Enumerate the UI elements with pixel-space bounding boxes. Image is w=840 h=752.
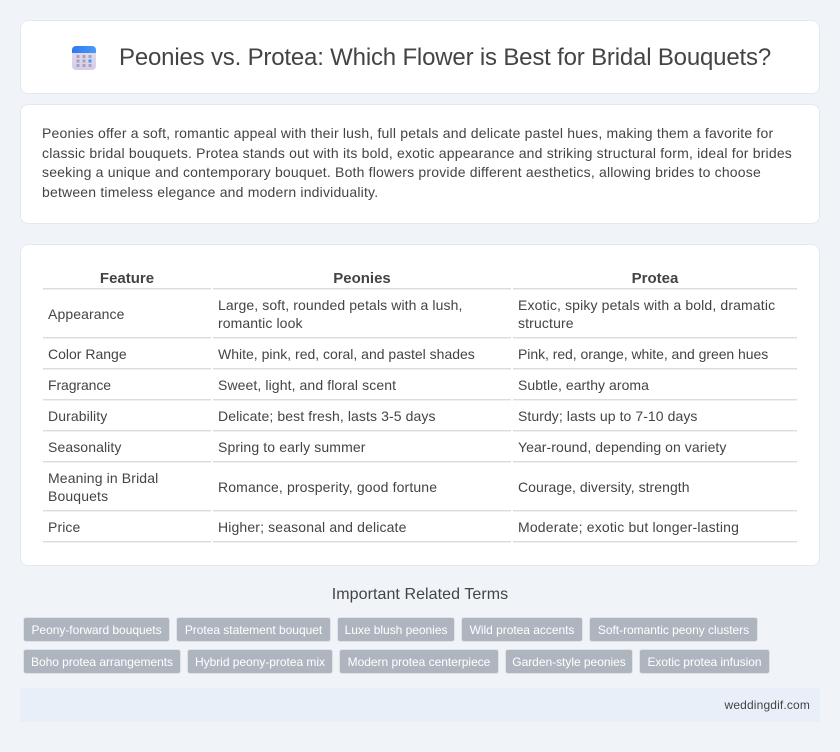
panel: introduction [20, 104, 820, 224]
text block: introduction [42, 125, 792, 200]
tag: Soft-romantic peony clusters [598, 623, 749, 637]
Protea appearance: structure [518, 315, 574, 331]
Peonies appearance: romantic look [218, 315, 303, 331]
Protea seasonality: Year-round, depending on variety [518, 439, 726, 455]
row: Seasonality: Seasonality [48, 439, 121, 455]
Protea color range: Pink, red, orange, white, and green hues [518, 346, 768, 362]
tag [23, 649, 181, 674]
source: weddingdif.com: weddingdif.com [725, 698, 810, 712]
text block: introduction: between timeless elegance and modern individuality. [42, 184, 378, 200]
heading: Important Related Terms: Important Related Terms [332, 586, 508, 603]
table header: Protea [513, 268, 797, 289]
panel: comparison table [20, 244, 820, 566]
Protea fragrance: Subtle, earthy aroma [518, 377, 649, 393]
Peonies seasonality: Spring to early summer [218, 439, 366, 455]
Peonies meaning: Romance, prosperity, good fortune [218, 479, 437, 495]
Protea price: Moderate; exotic but longer-lasting [518, 519, 739, 535]
tag: Garden-style peonies [512, 655, 626, 669]
text block: introduction: seeking a unique and contemporary bouquet. Both flowers provide different aesthetics, allowing brides to choose [42, 164, 761, 180]
Peonies durability: Delicate; best fresh, lasts 3-5 days [218, 408, 436, 424]
text block: introduction: Peonies offer a soft, romantic appeal with their lush, full petals and delicate pastel hues, making them a favorite for [42, 125, 773, 141]
row: Fragrance: Fragrance [48, 377, 111, 393]
Protea meaning: Courage, diversity, strength [518, 479, 690, 495]
tag: Modern protea centerpiece [348, 655, 490, 669]
tag [337, 617, 455, 642]
table header: Protea: Protea [632, 270, 678, 287]
row: Meaning in Bridal Bouquets [48, 470, 158, 504]
Protea durability: Sturdy; lasts up to 7-10 days [518, 408, 697, 424]
tag: Peony-forward bouquets [31, 623, 162, 637]
tag [23, 617, 170, 642]
row: Meaning in Bridal Bouquets: Meaning in Bridal [48, 470, 158, 486]
tag [589, 617, 758, 642]
Peonies appearance: Large, soft, rounded petals with a lush, [218, 297, 462, 313]
row: Price: Price [48, 519, 80, 535]
footer bar [20, 688, 820, 722]
Protea appearance: Exotic, spiky petals with a bold, dramatic [518, 297, 775, 313]
text block: introduction: classic bridal bouquets. Protea stands out with its bold, exotic appearance and striking structural form, ideal for brides [42, 145, 792, 161]
Peonies price: Higher; seasonal and delicate [218, 519, 407, 535]
table header: Feature: Feature [100, 270, 154, 287]
tag list [23, 617, 770, 674]
row: Appearance: Appearance [48, 306, 125, 322]
tag: Protea statement bouquet [185, 623, 322, 637]
row: Durability: Durability [48, 408, 107, 424]
panel: title card [20, 20, 820, 94]
tag [339, 649, 499, 674]
Protea appearance [518, 297, 775, 331]
tag: Exotic protea infusion [647, 655, 762, 669]
table header: Peonies: Peonies [333, 270, 391, 287]
table header: Peonies [213, 268, 511, 289]
table header: Feature [43, 268, 211, 289]
tag [461, 617, 583, 642]
icon: calendar [72, 46, 96, 70]
title: Peonies vs. Protea: Which Flower is Best for Bridal Bouquets? [119, 44, 771, 71]
row: Color Range: Color Range [48, 346, 127, 362]
tag [187, 649, 333, 674]
tag: Hybrid peony-protea mix [195, 655, 325, 669]
tag [176, 617, 331, 642]
tag [505, 649, 633, 674]
tag: Wild protea accents [470, 623, 574, 637]
Peonies fragrance: Sweet, light, and floral scent [218, 377, 396, 393]
tag [639, 649, 770, 674]
Peonies color range: White, pink, red, coral, and pastel shades [218, 346, 475, 362]
Peonies appearance [218, 297, 462, 331]
tag: Boho protea arrangements [31, 655, 173, 669]
tag: Luxe blush peonies [345, 623, 447, 637]
row: Meaning in Bridal Bouquets: Bouquets [48, 488, 108, 504]
